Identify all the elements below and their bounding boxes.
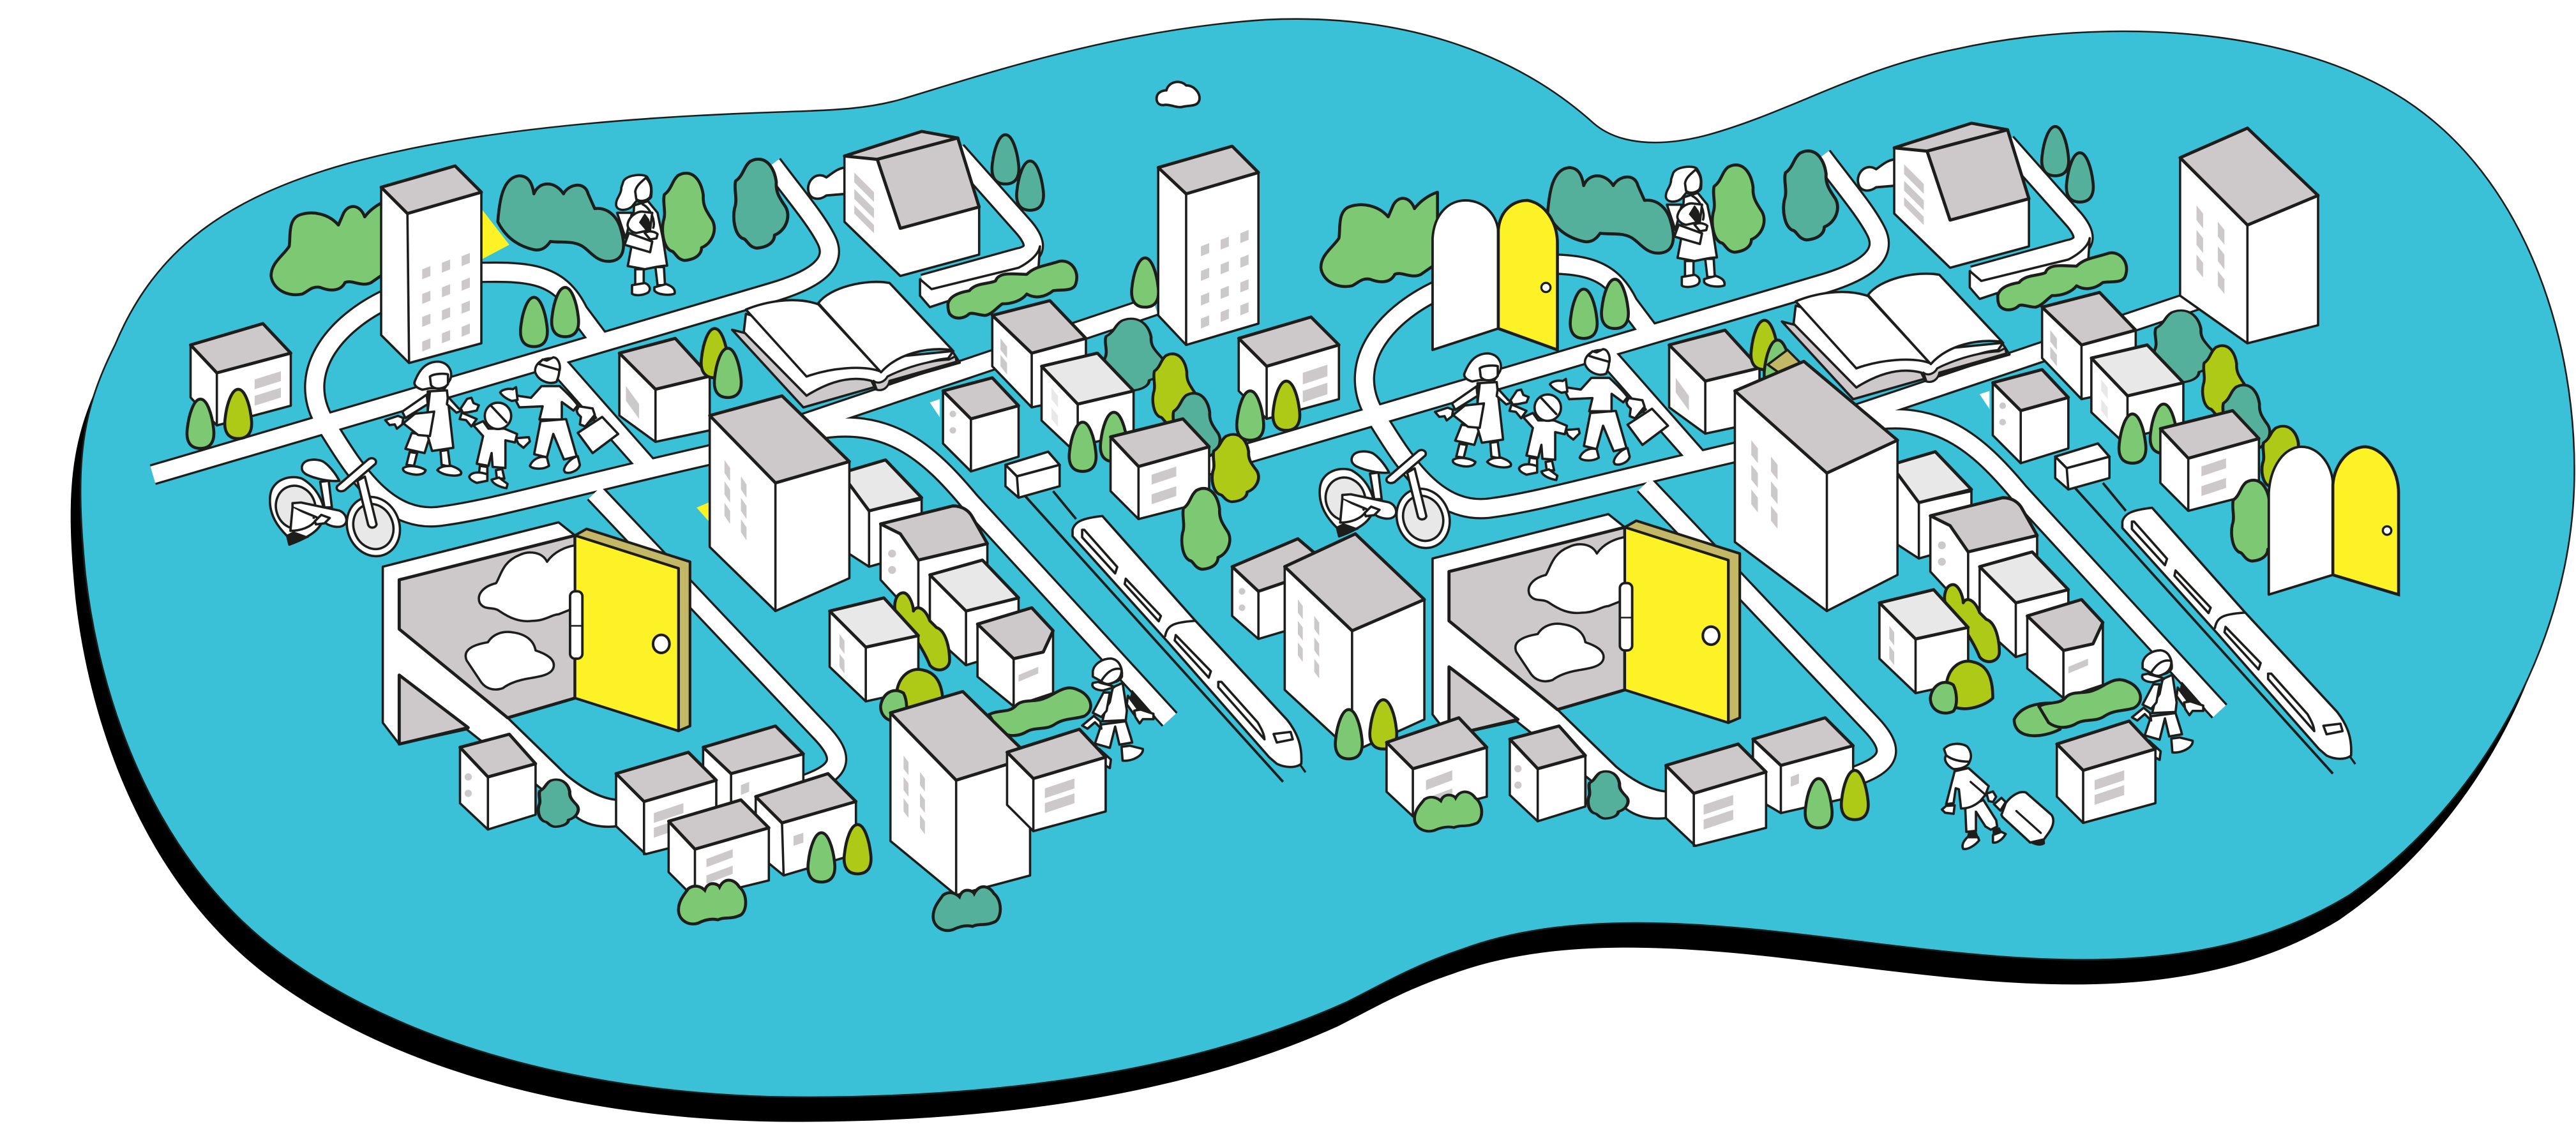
trees: cones beside box [1237, 381, 1300, 440]
building: big block front [891, 691, 1030, 895]
arched double door, upper [1433, 200, 1558, 350]
father [500, 357, 618, 473]
left town block [153, 131, 1306, 854]
right town block [1203, 123, 2355, 846]
person: walker with backpack [1082, 659, 1156, 768]
bicycle [270, 458, 409, 564]
tree: teal [734, 159, 788, 248]
trees: two teal cones [992, 135, 1044, 210]
building: rail-side box [1111, 419, 1209, 519]
bush: small teal [538, 779, 578, 827]
trees: two green cones in the loop [520, 287, 578, 347]
road lip [920, 246, 1040, 307]
mother [385, 362, 479, 476]
shrub: green centre bottom [1415, 792, 1482, 831]
trees: cones near houses [808, 825, 871, 882]
child [460, 403, 530, 488]
family: mother, child and father [385, 357, 618, 488]
building: tall tower right [2180, 128, 2318, 343]
building: front house row [616, 753, 716, 854]
hedge: upper green [948, 261, 1077, 318]
trees: lime pear and teal [1153, 354, 1220, 467]
hedge: green by the walker [989, 688, 1091, 735]
building: back row beside rail 2 [1041, 353, 1134, 449]
tall building wedge yellow [481, 209, 509, 260]
yellow wedge [697, 499, 716, 529]
trees: cones far left [187, 389, 252, 449]
hedge extension, right [2014, 703, 2060, 736]
building: box centre bottom [1387, 718, 1487, 816]
building: curved roof house [880, 506, 988, 621]
building: big block left [710, 396, 849, 611]
train [1073, 516, 1306, 772]
tree: green beside woman [663, 173, 714, 260]
building: box right of tower [1239, 317, 1339, 419]
yellow corner behind block [1768, 350, 1807, 381]
building: box in front of big block [1007, 730, 1106, 831]
building: small house far left [191, 324, 290, 426]
trees: cones under centre block [1336, 700, 1397, 759]
trees: cones by box [1069, 412, 1127, 472]
book [732, 282, 960, 407]
building: box behind centre block [1232, 539, 1330, 639]
building: tall tower left [381, 166, 481, 363]
icon: sky cloud [1157, 82, 1200, 107]
building: rear house row [703, 726, 803, 821]
building: house 15 [756, 774, 856, 876]
door panel with clouds [383, 522, 690, 827]
building: big block right [1735, 361, 1897, 611]
building: light roof front [830, 598, 918, 701]
building: back row beside rail 1 [992, 301, 1086, 407]
shrub: teal at foot of block [933, 887, 1000, 931]
bush: teal [498, 176, 624, 261]
bush: lime column [895, 593, 949, 670]
train station box [1006, 452, 1060, 498]
person: woman with bag [616, 175, 675, 295]
tree: lime pear front [1212, 435, 1258, 502]
bush: lime and green cluster [880, 670, 943, 721]
arched double door, lower right [2269, 447, 2399, 595]
tree: cone beside tower [1132, 258, 1159, 307]
trees: lime and green by the book [701, 329, 741, 398]
tree: green pear front [1182, 488, 1230, 569]
building: corner house [977, 608, 1053, 707]
bush: large green [271, 200, 388, 295]
person: traveller with suitcase [1942, 744, 2053, 849]
building: small grey roof [619, 338, 710, 442]
building: small box by door [460, 734, 536, 830]
tree: large teal [1104, 318, 1164, 391]
building: centre block [1284, 534, 1424, 753]
small cloud behind house [808, 168, 846, 199]
building: peaked house [845, 131, 979, 276]
building: small roof box [943, 378, 1018, 472]
building: box with stripes by the walker [1007, 730, 1106, 831]
roads [153, 151, 1170, 785]
building: tall tower centre [1158, 146, 1258, 345]
building: light roof by the road [841, 460, 922, 567]
building: light roof middle [930, 560, 1018, 665]
rail tracks [1025, 491, 1283, 782]
building: house 16 [668, 800, 769, 899]
trees: cones right bottom [1805, 770, 1868, 828]
shrub: green below houses [679, 880, 746, 924]
door: yellow open door [570, 529, 690, 731]
